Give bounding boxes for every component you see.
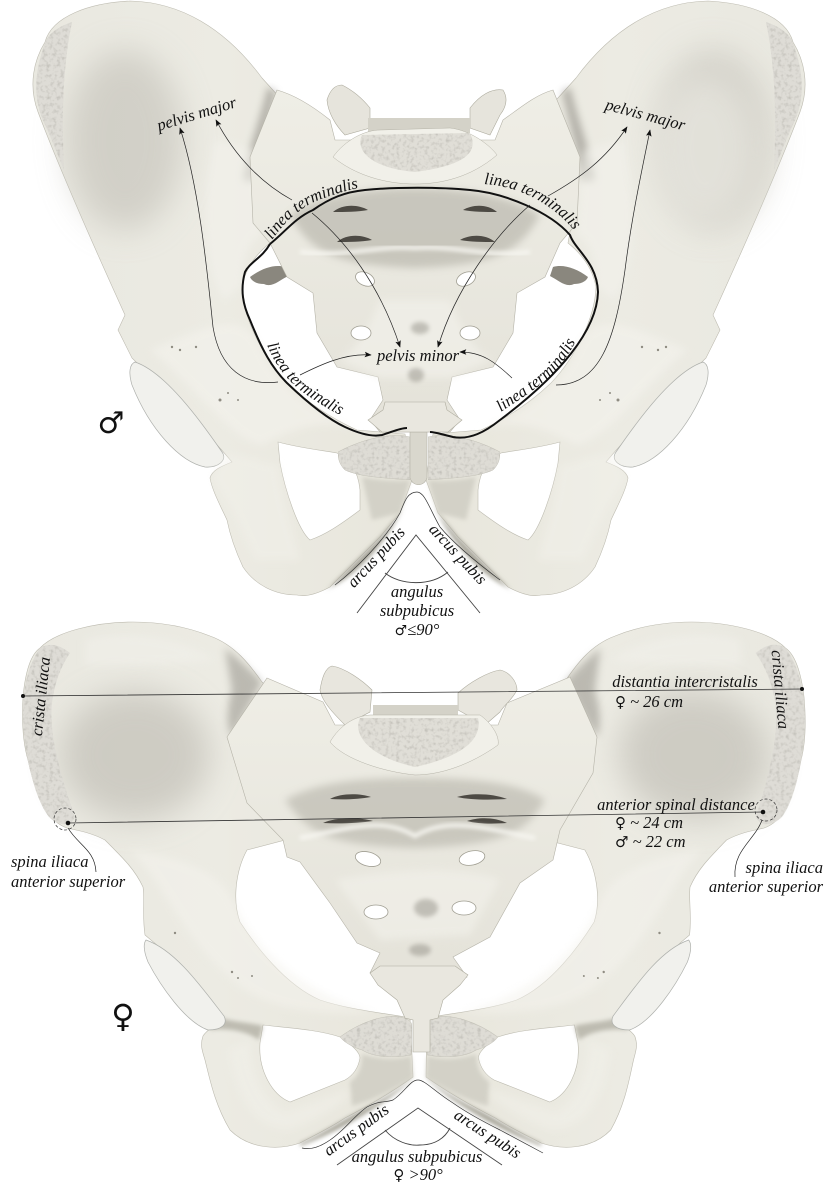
label: distantia intercristalis: distantia intercristalis: [612, 672, 758, 691]
left superior articular process: [327, 85, 370, 135]
label: female intercristal value: ♀ ~ 26 cm: [615, 692, 683, 711]
male right hip bone: [426, 1, 805, 596]
label: linea terminalis upper right: linea terminalis: [484, 172, 580, 229]
label: linea terminalis lower left: linea terminalis: [267, 342, 344, 414]
label: female angle value: ♀ >90°: [393, 1165, 443, 1184]
label: crista iliaca left: crista iliaca: [27, 656, 54, 737]
label: pelvis major right: pelvis major: [602, 94, 688, 134]
female left hip bone: [23, 622, 413, 1147]
sacral plateau: [330, 715, 498, 775]
label: arcus pubis right: arcus pubis: [451, 1105, 525, 1162]
panel: female pelvis: [11, 622, 824, 1184]
sacral canal: [368, 118, 470, 135]
label: angulus subpubicus: angulus subpubicus: [352, 1147, 482, 1166]
label: pelvis major left: pelvis major: [154, 92, 239, 135]
male left hip bone: [33, 1, 412, 596]
female sacrum: [227, 666, 597, 1052]
label: arcus pubis left: arcus pubis: [320, 1100, 392, 1160]
panel: male pelvis: [32, 0, 806, 639]
male sacrum: [250, 85, 580, 432]
label: subpubicus: subpubicus: [380, 601, 454, 620]
label: anterior spinal distance: anterior spinal distance: [597, 795, 755, 814]
male pubic arch angle: [335, 492, 500, 639]
sacral foramina: [351, 269, 480, 340]
label: anterior superior left: anterior superior: [11, 872, 126, 891]
right superior articular process: [470, 90, 506, 135]
label: female spinal value: ♀ ~ 24 cm: [615, 813, 683, 832]
lit area on male right ilium: [655, 75, 755, 225]
arrows: pelvis major and minor: [180, 120, 650, 385]
label: arcus pubis right: arcus pubis: [425, 520, 491, 588]
label: spina iliaca left: spina iliaca: [11, 852, 88, 871]
label: linea terminalis upper left: linea terminalis: [264, 179, 358, 240]
coccyx: [368, 402, 462, 432]
pelvic brim line: linea terminalis: [243, 188, 598, 438]
label: angulus: angulus: [391, 582, 443, 601]
measurement lines: [21, 687, 804, 877]
label: spina iliaca right: spina iliaca: [746, 858, 823, 877]
label: crista iliaca right: crista iliaca: [768, 649, 793, 730]
left superior articular process: [320, 666, 372, 725]
label: linea terminalis lower right: linea terminalis: [496, 338, 574, 412]
label: arcus pubis left: arcus pubis: [343, 523, 409, 591]
female symbol: ♀: [111, 997, 135, 1035]
male pubic symphysis: [410, 430, 427, 485]
sacral canal: [373, 705, 458, 722]
coccyx: [370, 966, 468, 1052]
label: pelvis minor: pelvis minor: [376, 346, 460, 365]
female right hip bone: [412, 622, 819, 1147]
label: male spinal value: ♂ ~ 22 cm: [615, 832, 686, 851]
right superior articular process: [458, 670, 517, 725]
female pubic arch angle: [302, 1080, 543, 1184]
sacral plateau: [333, 128, 497, 184]
label: anterior superior right: anterior superior: [709, 877, 824, 896]
male symbol: ♂: [98, 406, 124, 441]
label: male angle value: ♂≤90°: [395, 620, 440, 639]
sacral foramina: [354, 848, 486, 919]
